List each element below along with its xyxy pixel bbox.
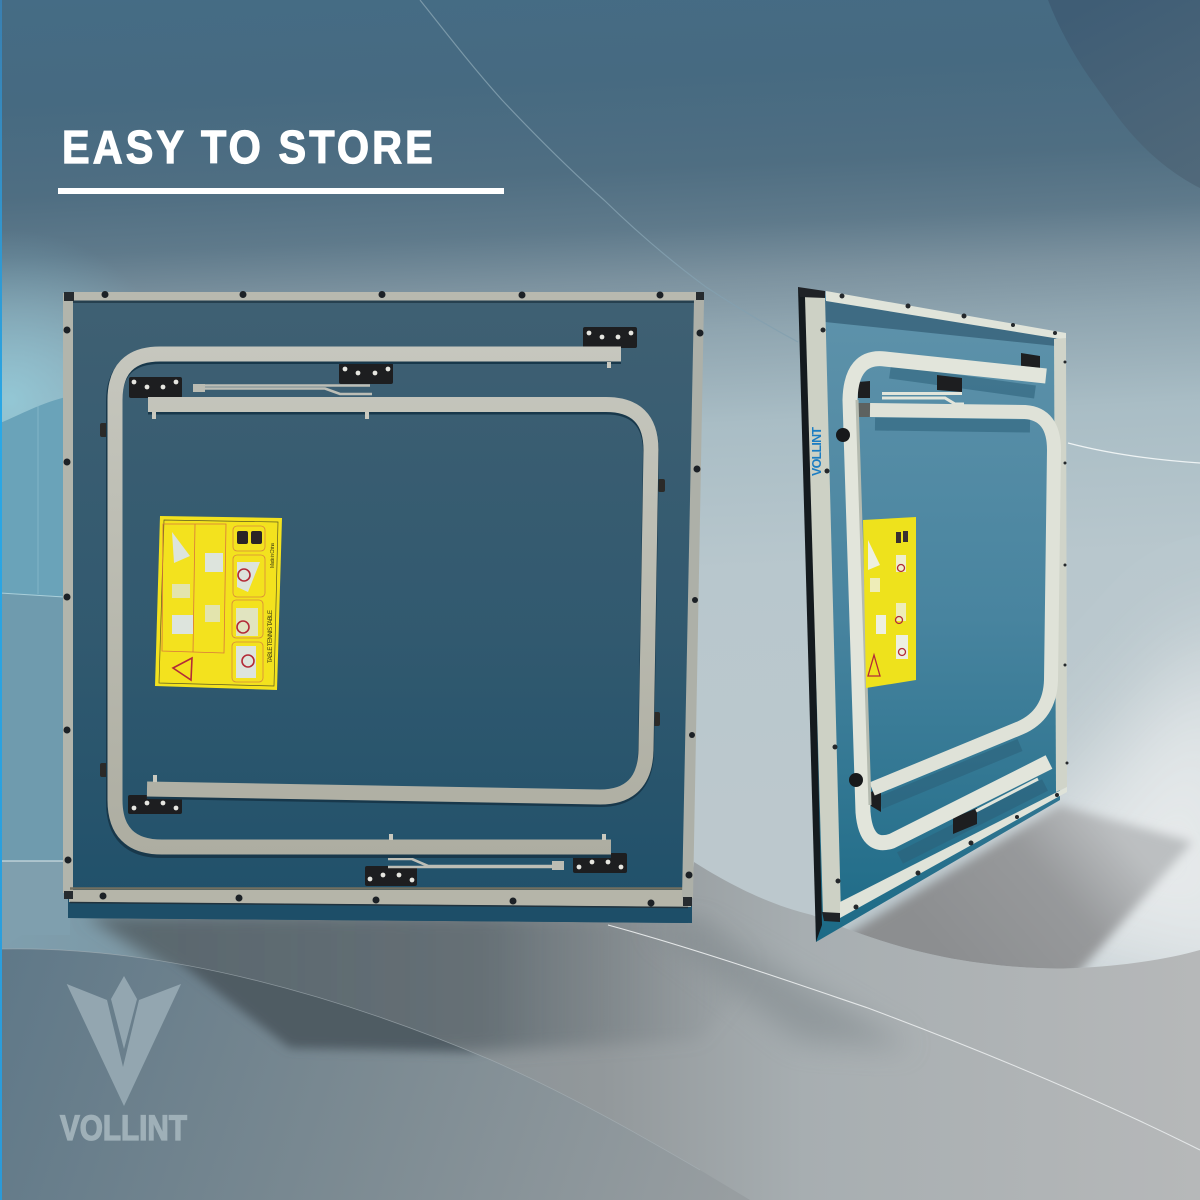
logo wordmark: VOLLINT: [60, 1109, 187, 1148]
frame rivets: [64, 291, 704, 906]
title underline: [58, 188, 504, 194]
bolted bracket: [858, 403, 872, 417]
shadow: right table: [848, 802, 1192, 968]
warning triangle: [173, 658, 192, 680]
right table: folded, standing in perspective: [798, 287, 1068, 942]
hinge brackets: [858, 353, 1040, 834]
knobs: [836, 428, 863, 787]
frame rivets: [820, 294, 1068, 910]
prohibition panels: [232, 526, 265, 682]
instruction sticker: [155, 516, 282, 690]
shadow: left table: [85, 915, 912, 1052]
arm end blocks: [193, 384, 564, 870]
folding arms: [882, 394, 1038, 811]
frame rails: [798, 287, 1067, 922]
outer leg tube: [114, 354, 621, 850]
knobs: [100, 423, 665, 777]
sticker origin: Made in China: [270, 543, 276, 568]
logo mark: [67, 976, 181, 1106]
title text: EASY TO STORE: [62, 122, 433, 174]
outer leg tube: [850, 359, 1049, 843]
hinge brackets: [128, 327, 637, 886]
sticker label: TABLE TENNIS TABLE: [268, 610, 274, 663]
brand on rail: VOLLINT: [810, 427, 824, 476]
logo: Vollint: [60, 976, 187, 1148]
sticker diagrams: [172, 532, 260, 678]
black side edge: [798, 287, 822, 942]
tube bolts: [152, 362, 611, 840]
left accent strip: [0, 0, 2, 1200]
inner leg tube: [147, 404, 651, 799]
heading: [58, 122, 504, 194]
board: [805, 292, 1062, 942]
prohibition signs: [237, 569, 254, 667]
folding arms: [205, 386, 555, 867]
sticker badges: [237, 531, 262, 544]
tube shadows: [875, 372, 1045, 858]
inner leg tube: [870, 410, 1054, 789]
tube shading: [857, 400, 870, 805]
left table: folded flat, back view: [63, 291, 704, 923]
frame rails: [63, 292, 704, 923]
top shade on board: [825, 300, 1056, 346]
floor curve and contact shadow: [0, 925, 1200, 1200]
board: [68, 296, 700, 923]
instruction sticker: [863, 517, 916, 688]
